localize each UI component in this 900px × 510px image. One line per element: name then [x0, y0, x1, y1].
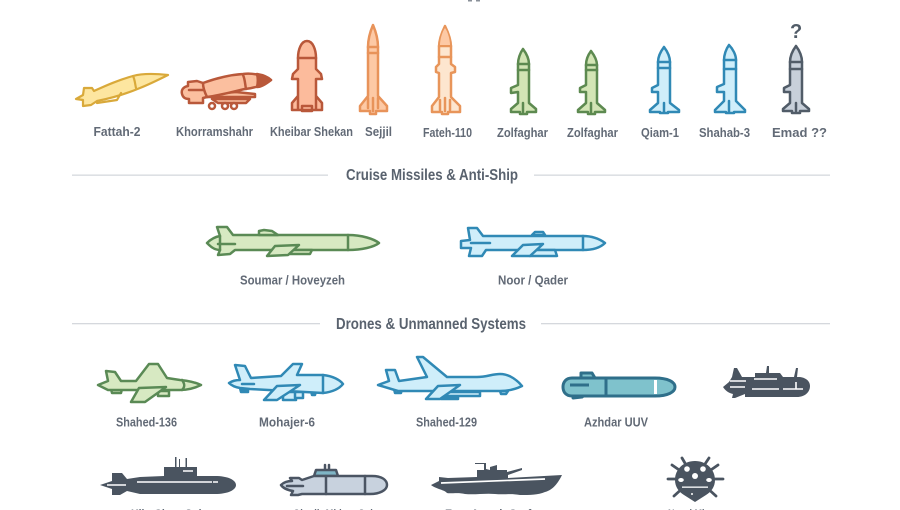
- weapon: Azhdar UUV: [563, 373, 675, 430]
- weapon: Qiam-1: [641, 47, 679, 140]
- icon: Noor cruise missile: [461, 228, 605, 256]
- icon: Khorramshahr missile on launcher: [182, 74, 271, 109]
- section: ballistic missiles: [76, 21, 827, 140]
- section: cruise missiles: [207, 227, 605, 288]
- label: Zolfaghar: Zolfaghar: [567, 125, 618, 140]
- weapon: Fateh-110: [423, 26, 472, 140]
- weapon: Shahed-136: [98, 364, 201, 430]
- section: drones and unmanned systems: [98, 357, 810, 510]
- weapon: Kheibar Shekan: [270, 41, 353, 139]
- icon: naval mine: [668, 458, 723, 502]
- icon: Shahed-136 drone: [98, 364, 201, 402]
- weapon: Zolfaghar (second): [567, 51, 618, 140]
- label: Azhdar UUV: Azhdar UUV: [584, 414, 648, 430]
- icon: Shahed-129 drone: [378, 357, 522, 399]
- icon: dark surface-running submarine: [723, 366, 810, 398]
- icon: Kheibar Shekan rocket: [292, 41, 322, 111]
- weapon: Mohajer-6: [229, 364, 343, 430]
- label: Kheibar Shekan: Kheibar Shekan: [270, 124, 353, 139]
- icon: Azhdar underwater vehicle: [563, 373, 675, 398]
- weapon: Shahab-3: [699, 45, 750, 140]
- label: Khorramshahr: Khorramshahr: [176, 124, 253, 139]
- weapon: Sejjil: [360, 25, 392, 139]
- icon: armed fast attack boat: [431, 463, 562, 495]
- label: Fateh-110: Fateh-110: [423, 125, 472, 140]
- icon: Soumar cruise missile: [207, 227, 379, 256]
- label: Soumar / Hoveyzeh: Soumar / Hoveyzeh: [240, 272, 345, 288]
- heading: Cruise Missiles & Anti-Ship: Cruise Missiles & Anti-Ship: [346, 167, 518, 184]
- weapon: Emad: [772, 21, 827, 140]
- label: Mohajer-6: Mohajer-6: [259, 414, 315, 430]
- label: Shahed-129: Shahed-129: [416, 414, 477, 430]
- weapon: Khorramshahr: [176, 74, 271, 139]
- label: Qiam-1: Qiam-1: [641, 125, 679, 140]
- label: Shahab-3: Shahab-3: [699, 125, 750, 140]
- label: Fattah-2: Fattah-2: [94, 124, 140, 139]
- weapon: Fattah-2: [76, 74, 168, 139]
- label: Zolfaghar: Zolfaghar: [497, 125, 548, 140]
- label: Sejjil: Sejjil: [365, 124, 392, 139]
- icon: Sejjil rocket: [360, 25, 387, 114]
- weapon: Shahed-129: [378, 357, 522, 430]
- weapon: Noor / Qader: [461, 228, 605, 288]
- icon: Qiam-1 rocket: [650, 47, 679, 113]
- icon: Mohajer-6 drone: [229, 364, 343, 400]
- icon: Kilo-class submarine: [100, 457, 236, 495]
- label: Shahed-136: Shahed-136: [116, 414, 177, 430]
- icon: Emad rocket: [783, 46, 809, 113]
- weapon: Zolfaghar (first): [497, 49, 548, 140]
- label: Noor / Qader: Noor / Qader: [498, 272, 568, 288]
- icon: Fateh-110 rocket: [432, 26, 460, 114]
- icon: Fattah-2 hypersonic glider: [76, 74, 168, 106]
- weapon: Soumar / Hoveyzeh: [207, 227, 379, 288]
- label: Emad ??: Emad ??: [772, 125, 827, 140]
- icon: Zolfaghar rocket: [578, 51, 605, 114]
- icon: Zolfaghar rocket: [511, 49, 536, 114]
- icon: Ghadir midget submarine: [281, 465, 387, 495]
- icon: question mark: ?: [790, 21, 802, 43]
- heading: Drones & Unmanned Systems: Drones & Unmanned Systems: [336, 316, 526, 333]
- icon: Shahab-3 rocket: [715, 45, 745, 113]
